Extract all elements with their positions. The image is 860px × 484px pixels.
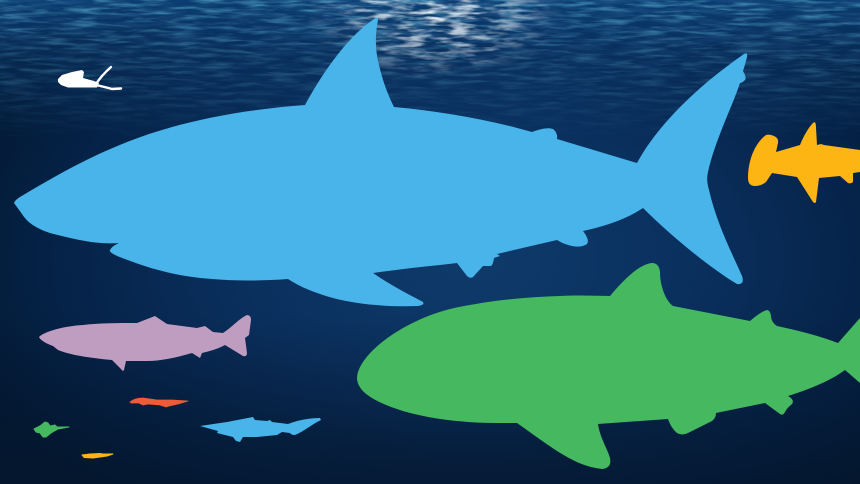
shark: large blue silhouette — [14, 18, 747, 306]
icon: white diver silhouette — [58, 67, 121, 89]
shark: yellow hammerhead silhouette — [748, 122, 860, 203]
shark: large green silhouette — [357, 263, 860, 469]
shark: pink silhouette — [39, 315, 251, 371]
shark: orange-red small silhouette — [130, 398, 188, 407]
shark: small blue silhouette — [200, 417, 321, 442]
background: rippled water surface with light — [0, 0, 860, 140]
shark: small yellow silhouette — [82, 454, 113, 458]
shark: small green silhouette — [34, 422, 69, 437]
